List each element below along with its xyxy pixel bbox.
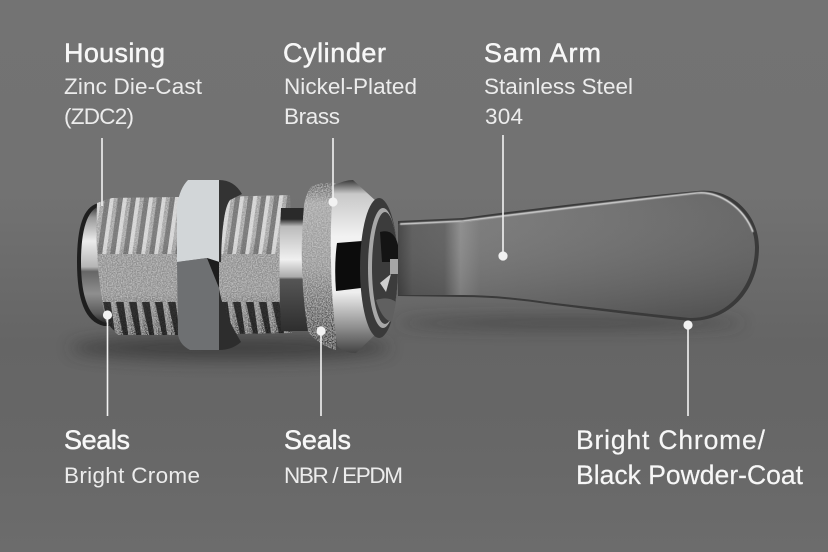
label: finish: Bright Chrome/ xyxy=(576,425,766,455)
key face xyxy=(360,198,398,338)
label: cylinder: Brass xyxy=(284,104,340,129)
label: cylinder xyxy=(283,38,417,129)
label: seals left: Seals xyxy=(64,425,130,455)
label: housing xyxy=(64,38,203,129)
label: seals center: Seals xyxy=(284,425,351,455)
dome cap xyxy=(331,180,377,353)
label: sam arm: Sam Arm xyxy=(484,38,601,68)
hex nut xyxy=(177,180,242,350)
lock photo: cam lock assembly xyxy=(70,180,759,360)
label: finish: Black Powder-Coat xyxy=(576,460,804,490)
leader line: housing xyxy=(101,138,103,206)
label: finish xyxy=(576,425,804,490)
left thread xyxy=(96,197,180,335)
sam arm xyxy=(398,191,759,321)
label: cylinder: Nickel-Plated xyxy=(284,74,417,99)
label: sam arm: Stainless Steel xyxy=(484,74,633,99)
shadow under lock xyxy=(70,318,745,360)
leader: cylinder xyxy=(328,138,338,207)
label: seals left xyxy=(64,425,200,488)
leader: sam arm xyxy=(498,135,508,261)
label: seals center: NBR / EPDM xyxy=(284,463,403,488)
label: housing: Zinc Die-Cast xyxy=(64,74,203,99)
flange xyxy=(302,183,336,350)
right thread xyxy=(218,195,292,334)
label: housing: Housing xyxy=(64,38,165,68)
label: seals left: Bright Crome xyxy=(64,463,200,488)
label: seals center xyxy=(284,425,403,488)
label: sam arm xyxy=(484,38,633,129)
back ring xyxy=(77,203,116,326)
leader: finish xyxy=(683,320,693,416)
leader: seals center xyxy=(316,326,326,416)
label: sam arm: 304 xyxy=(485,104,523,129)
label: housing: (ZDC2) xyxy=(64,104,134,129)
leader: seals left xyxy=(103,310,112,416)
label: cylinder: Cylinder xyxy=(283,38,386,68)
collar xyxy=(280,208,308,331)
